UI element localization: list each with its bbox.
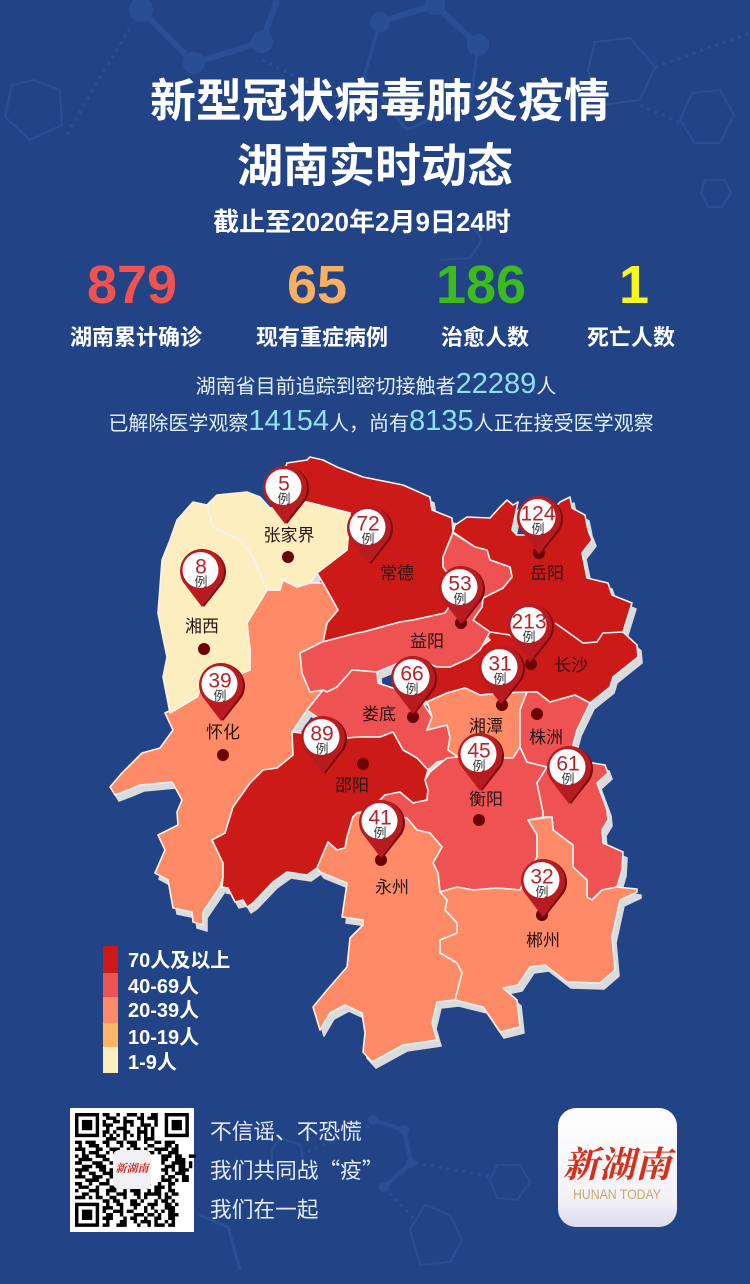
stat: deaths: 死亡人数 [587, 320, 675, 352]
region: Xiangtan [427, 688, 527, 758]
region: Chenzhou [440, 817, 637, 1032]
stat: recovered [436, 255, 529, 352]
stat: deaths: 1 [619, 255, 649, 315]
pin: Yueyang 124: 例 [531, 518, 545, 538]
date subtitle: 截止至2020年2月9日24时 [213, 207, 511, 237]
city labels: 永州 [375, 873, 409, 898]
title: 新型冠状病毒肺炎疫情 [150, 65, 610, 131]
city labels: 常德 [380, 559, 414, 584]
pin: Yiyang 53 [439, 566, 485, 624]
pin: Zhuzhou 61 [547, 746, 593, 804]
city labels: 长沙 [554, 651, 588, 676]
pin: Loudi 66: 66 [400, 662, 424, 686]
stat: recovered: 治愈人数 [441, 320, 529, 352]
city labels: 怀化 [206, 718, 240, 743]
city labels: 邵阳 [335, 771, 369, 796]
pin: Xiangxi 8: 例 [194, 572, 208, 590]
city dots [198, 547, 548, 921]
legend: 10-19人 [128, 1027, 199, 1049]
slogan text [210, 1115, 384, 1224]
city labels: 衡阳 [469, 785, 503, 810]
region: Shaoyang [212, 732, 428, 907]
pin: Huaihua 39: 例 [213, 686, 227, 704]
pin: Huaihua 39: 39 [208, 670, 232, 692]
city labels: 株洲 [529, 723, 563, 748]
Hunan Today logo: HUNAN TODAY [573, 1186, 662, 1202]
pin: Chenzhou 32: 32 [530, 866, 554, 888]
city labels [185, 521, 588, 951]
pin: Yongzhou 41 [359, 800, 405, 858]
stat: deaths [587, 255, 675, 352]
city labels: 张家界 [264, 521, 314, 546]
QR code: 新湖南 [116, 1160, 150, 1176]
pin: Changde 72: 例 [361, 528, 375, 548]
city labels: 益阳 [410, 627, 444, 652]
region: Huaihua [110, 580, 338, 925]
close contacts text: 已解除医学观察14154人，尚有8135人正在接受医学观察 [108, 405, 654, 437]
region: Changde [275, 457, 460, 642]
pin: Shaoyang 89: 例 [315, 738, 329, 758]
pin: Xiangtan 31: 31 [488, 652, 512, 676]
pin: Zhangjiajie 5 [263, 466, 309, 524]
slogan text: 我们共同战“疫” [210, 1154, 384, 1185]
close contacts text: 湖南省目前追踪到密切接触者22289人 [196, 368, 556, 400]
pin: Zhuzhou 61: 例 [561, 768, 575, 788]
Hunan Today logo: 新湖南 [563, 1137, 676, 1188]
pin: Changde 72: 72 [356, 512, 380, 536]
Hunan Today logo [558, 1108, 677, 1227]
pin: Changde 72 [347, 506, 393, 564]
pin: Changsha 213 [508, 604, 554, 662]
title: 湖南实时动态 [237, 130, 513, 196]
pin: Shaoyang 89 [301, 716, 347, 774]
stat: recovered: 186 [436, 255, 526, 315]
stat: severe [256, 255, 388, 352]
pin: Xiangtan 31: 例 [493, 668, 507, 688]
region: Yueyang and Changsha [405, 497, 638, 703]
pin: Huaihua 39 [199, 663, 245, 721]
pin: Hengyang 45: 例 [472, 756, 486, 774]
region: Zhangjiajie [207, 492, 350, 590]
legend [103, 946, 230, 1074]
pin: Zhuzhou 61: 61 [556, 752, 580, 776]
pin: Xiangxi 8: 8 [195, 556, 207, 578]
region: Yongzhou [313, 813, 462, 1062]
pin: Changsha 213: 例 [522, 626, 536, 646]
pin: Zhangjiajie 5: 例 [277, 488, 291, 508]
pin: Zhangjiajie 5: 5 [278, 472, 290, 496]
region: Loudi [307, 670, 458, 770]
city labels: 湘潭 [469, 712, 503, 737]
pin: Shaoyang 89: 89 [310, 722, 334, 746]
legend: 20-39人 [128, 1000, 199, 1022]
pin: Yongzhou 41: 例 [373, 822, 387, 842]
region: Zhuzhou [520, 692, 623, 900]
map of Hunan [110, 457, 638, 1062]
city labels: 娄底 [362, 700, 396, 725]
title [150, 65, 610, 196]
slogan text: 我们在一起 [210, 1193, 319, 1224]
pin: Loudi 66 [391, 656, 437, 714]
close contacts text [108, 368, 654, 437]
QR code [70, 1108, 196, 1232]
stat: confirmed: 879 [87, 255, 177, 315]
pin: Loudi 66: 例 [405, 678, 419, 698]
pin: Xiangtan 31 [479, 646, 525, 704]
stat: severe: 现有重症病例 [256, 320, 388, 352]
city labels: 岳阳 [530, 559, 564, 584]
pin: Changsha 213: 213 [511, 610, 547, 634]
slogan text: 不信谣、不恐慌 [210, 1115, 362, 1146]
pin: Yiyang 53: 53 [448, 572, 472, 596]
city labels: 郴州 [526, 926, 560, 951]
pin: Yueyang 124: 124 [520, 502, 556, 526]
region: Xiangxi [158, 502, 267, 713]
legend: 1-9人 [128, 1052, 177, 1074]
pin: Xiangxi 8 [180, 549, 226, 607]
region: Yiyang [300, 533, 512, 692]
pin: Yueyang 124 [517, 496, 563, 554]
region: Hengyang [357, 747, 547, 892]
pin: Chenzhou 32 [521, 859, 567, 917]
legend: 70人及以上 [128, 949, 230, 972]
stat: confirmed: 湖南累计确诊 [70, 320, 203, 352]
stat: severe: 65 [287, 255, 347, 315]
pin: Yiyang 53: 例 [453, 588, 467, 608]
pin: Hengyang 45: 45 [467, 740, 491, 762]
legend: 40-69人 [128, 976, 199, 998]
stat: confirmed [70, 255, 203, 352]
city labels: 湘西 [185, 612, 219, 637]
pin: Yongzhou 41: 41 [368, 806, 392, 830]
pin: Chenzhou 32: 例 [535, 882, 549, 900]
pin: Hengyang 45 [458, 733, 504, 791]
